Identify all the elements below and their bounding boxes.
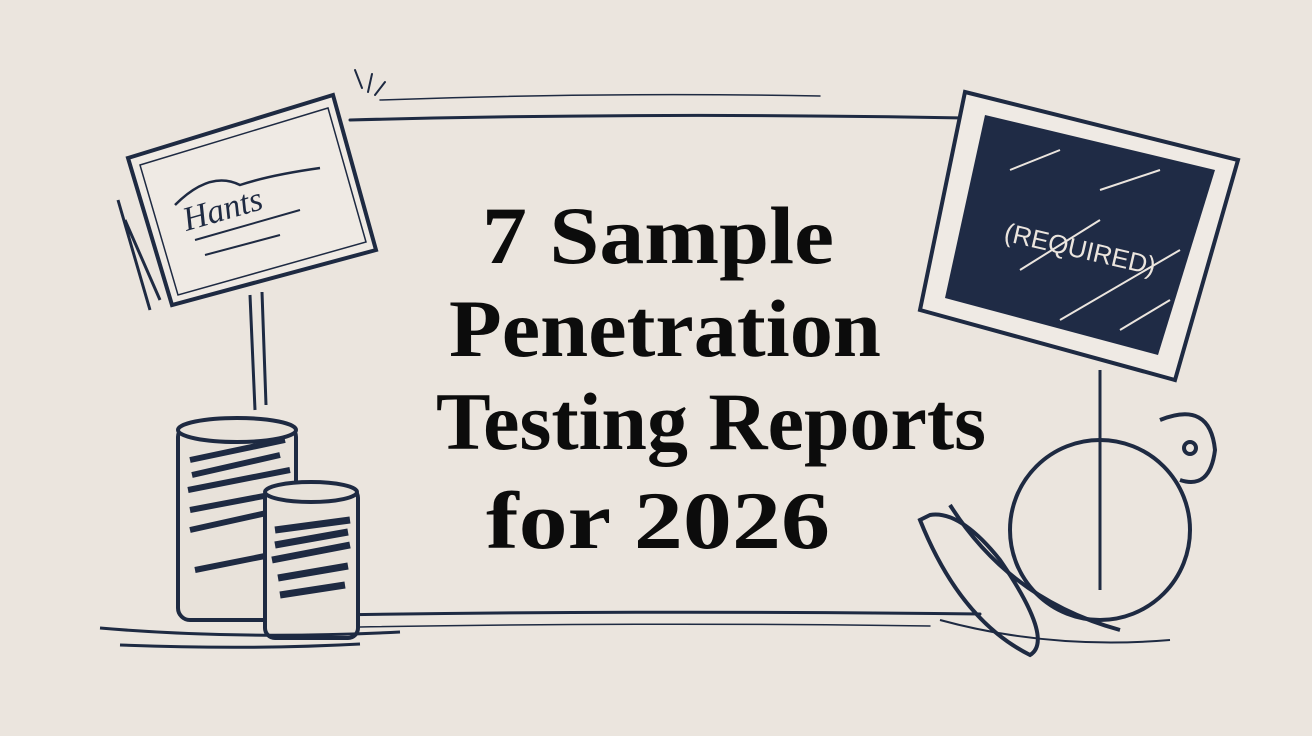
title: for 2026 [486,475,830,566]
title: Testing Reports [436,376,986,467]
title: 7 Sample [482,190,834,281]
frame sketch lines [330,70,980,627]
sign left: Hants [178,181,267,239]
ring and arcs right [920,414,1215,655]
sign right: (REQUIRED) [1002,217,1159,281]
cans [100,418,400,647]
sign left [118,95,376,410]
title [436,190,986,566]
title: Penetration [449,283,881,374]
sign right [920,92,1238,590]
